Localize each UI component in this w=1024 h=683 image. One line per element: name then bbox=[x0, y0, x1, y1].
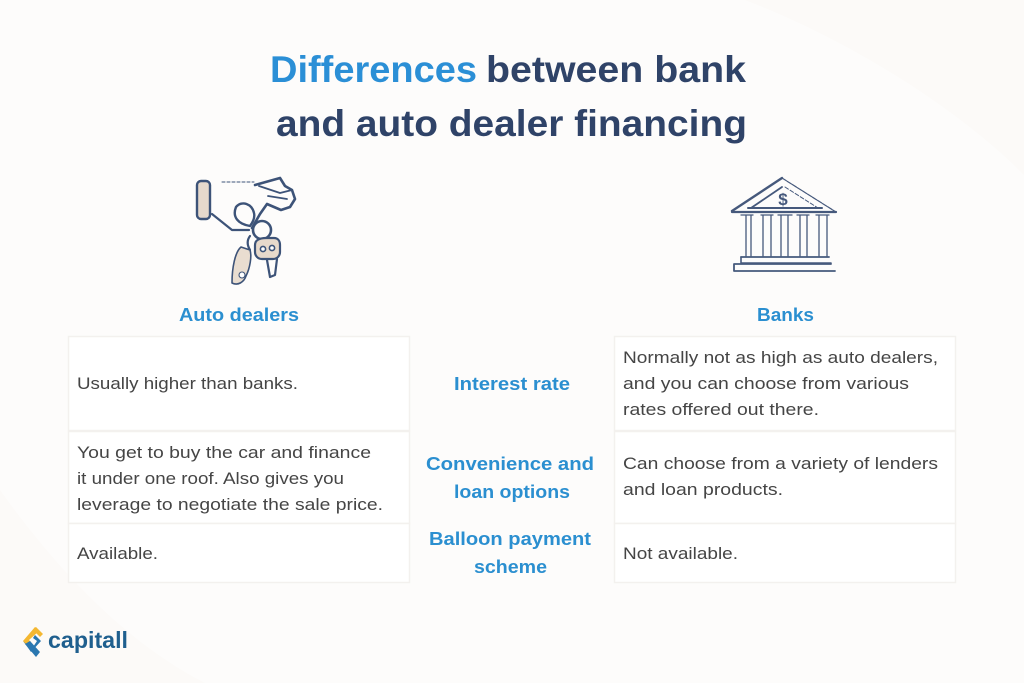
panel: banks table: rates offered out there. bbox=[623, 400, 819, 419]
logo: capitall: capitall bbox=[48, 627, 128, 653]
panel: auto dealers table: leverage to negotiate the sale price. bbox=[77, 495, 383, 514]
panel: auto dealers table: Usually higher than banks. bbox=[77, 374, 298, 393]
panel: banks table: Not available. bbox=[623, 544, 738, 563]
panel: banks table bbox=[614, 336, 956, 582]
row label: balloon payment scheme: scheme bbox=[474, 556, 547, 577]
row label: interest rate: Interest rate bbox=[454, 373, 570, 394]
icon: hand holding car keys bbox=[197, 178, 295, 284]
title: and auto dealer financing bbox=[276, 103, 747, 144]
panel: banks table: Normally not as high as auto dealers, bbox=[623, 348, 938, 367]
heading: auto dealers: Auto dealers bbox=[179, 304, 299, 325]
icon: bank building bbox=[732, 178, 836, 271]
panel: auto dealers table: it under one roof. Also gives you bbox=[77, 469, 344, 488]
panel: auto dealers table bbox=[68, 336, 410, 582]
row label: convenience and loan options: loan options bbox=[454, 481, 570, 502]
panel: auto dealers table: Available. bbox=[77, 544, 158, 563]
icon: bank building: $ bbox=[778, 190, 788, 209]
panel: banks table: and loan products. bbox=[623, 480, 783, 499]
panel: auto dealers table: You get to buy the car and finance bbox=[77, 443, 371, 462]
row label: balloon payment scheme: Balloon payment bbox=[429, 528, 591, 549]
row label: convenience and loan options: Convenience and bbox=[426, 453, 594, 474]
heading: banks: Banks bbox=[757, 304, 814, 325]
title bbox=[270, 49, 747, 144]
logo: capitall bbox=[23, 627, 128, 657]
row label: convenience and loan options bbox=[426, 453, 594, 502]
panel: banks table: Can choose from a variety of lenders bbox=[623, 454, 938, 473]
row label: balloon payment scheme bbox=[429, 528, 591, 577]
title: between bank bbox=[486, 49, 746, 90]
panel: banks table: and you can choose from various bbox=[623, 374, 909, 393]
title: Differences bbox=[270, 49, 477, 90]
